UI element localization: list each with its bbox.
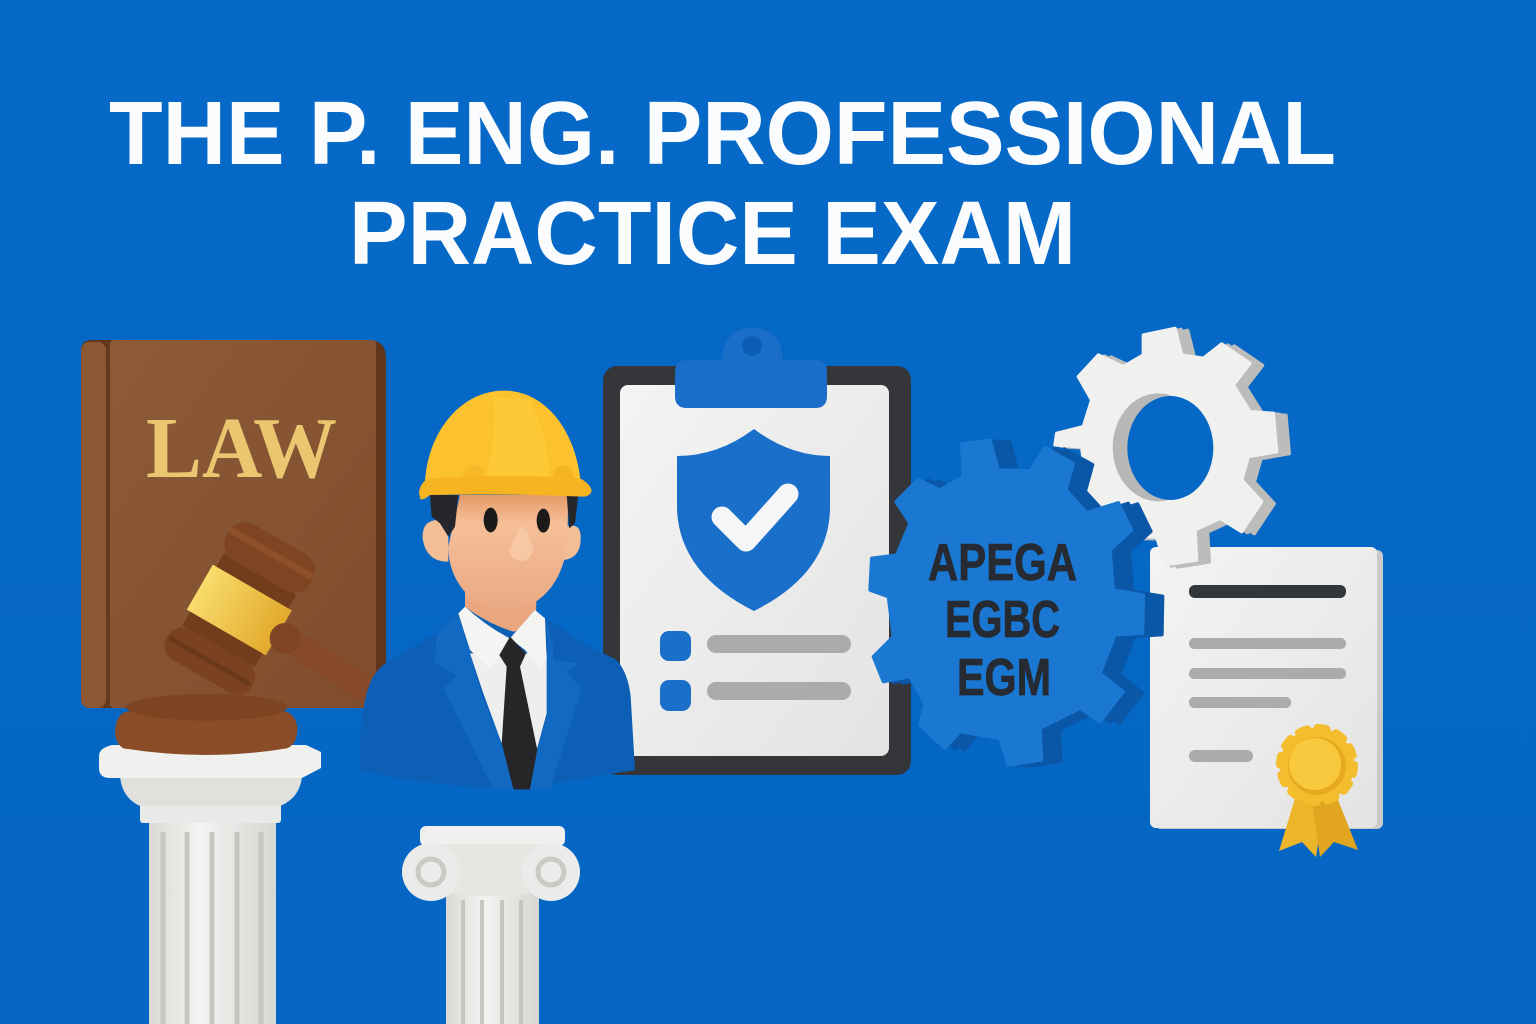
book label: LAW: LAW — [146, 399, 337, 496]
shirt — [470, 653, 547, 750]
ribbon seal — [1279, 728, 1358, 857]
suit — [360, 610, 635, 789]
column middle — [402, 826, 580, 1024]
gear labels: EGBC — [945, 591, 1060, 649]
face — [448, 495, 568, 610]
clipboard — [603, 328, 911, 775]
blue gear — [870, 440, 1163, 766]
check mark — [722, 494, 788, 541]
tie — [499, 637, 537, 789]
lapels — [435, 613, 582, 789]
shield icon — [677, 429, 830, 611]
gear labels — [928, 534, 1077, 707]
column left — [99, 745, 321, 1024]
collar — [458, 607, 547, 669]
gavel handle — [287, 632, 370, 703]
gavel — [115, 515, 370, 755]
gavel head — [159, 515, 322, 701]
white gear — [1055, 328, 1289, 567]
gear labels: APEGA — [928, 534, 1077, 592]
hard hat — [425, 391, 581, 483]
eyes — [484, 508, 498, 532]
hair — [430, 495, 578, 537]
title: PRACTICE EXAM — [349, 184, 1076, 284]
certificate — [1150, 547, 1383, 857]
gavel handle collar — [270, 623, 300, 654]
neck — [465, 583, 537, 632]
clipboard clip — [675, 328, 827, 408]
title — [109, 84, 1336, 284]
title: THE P. ENG. PROFESSIONAL — [109, 84, 1336, 184]
law book — [81, 340, 386, 708]
gear labels: EGM — [957, 649, 1051, 707]
engineer — [360, 391, 635, 789]
gavel base — [115, 694, 297, 755]
ears — [423, 520, 581, 562]
checklist rows — [660, 631, 851, 711]
nose — [509, 527, 533, 561]
